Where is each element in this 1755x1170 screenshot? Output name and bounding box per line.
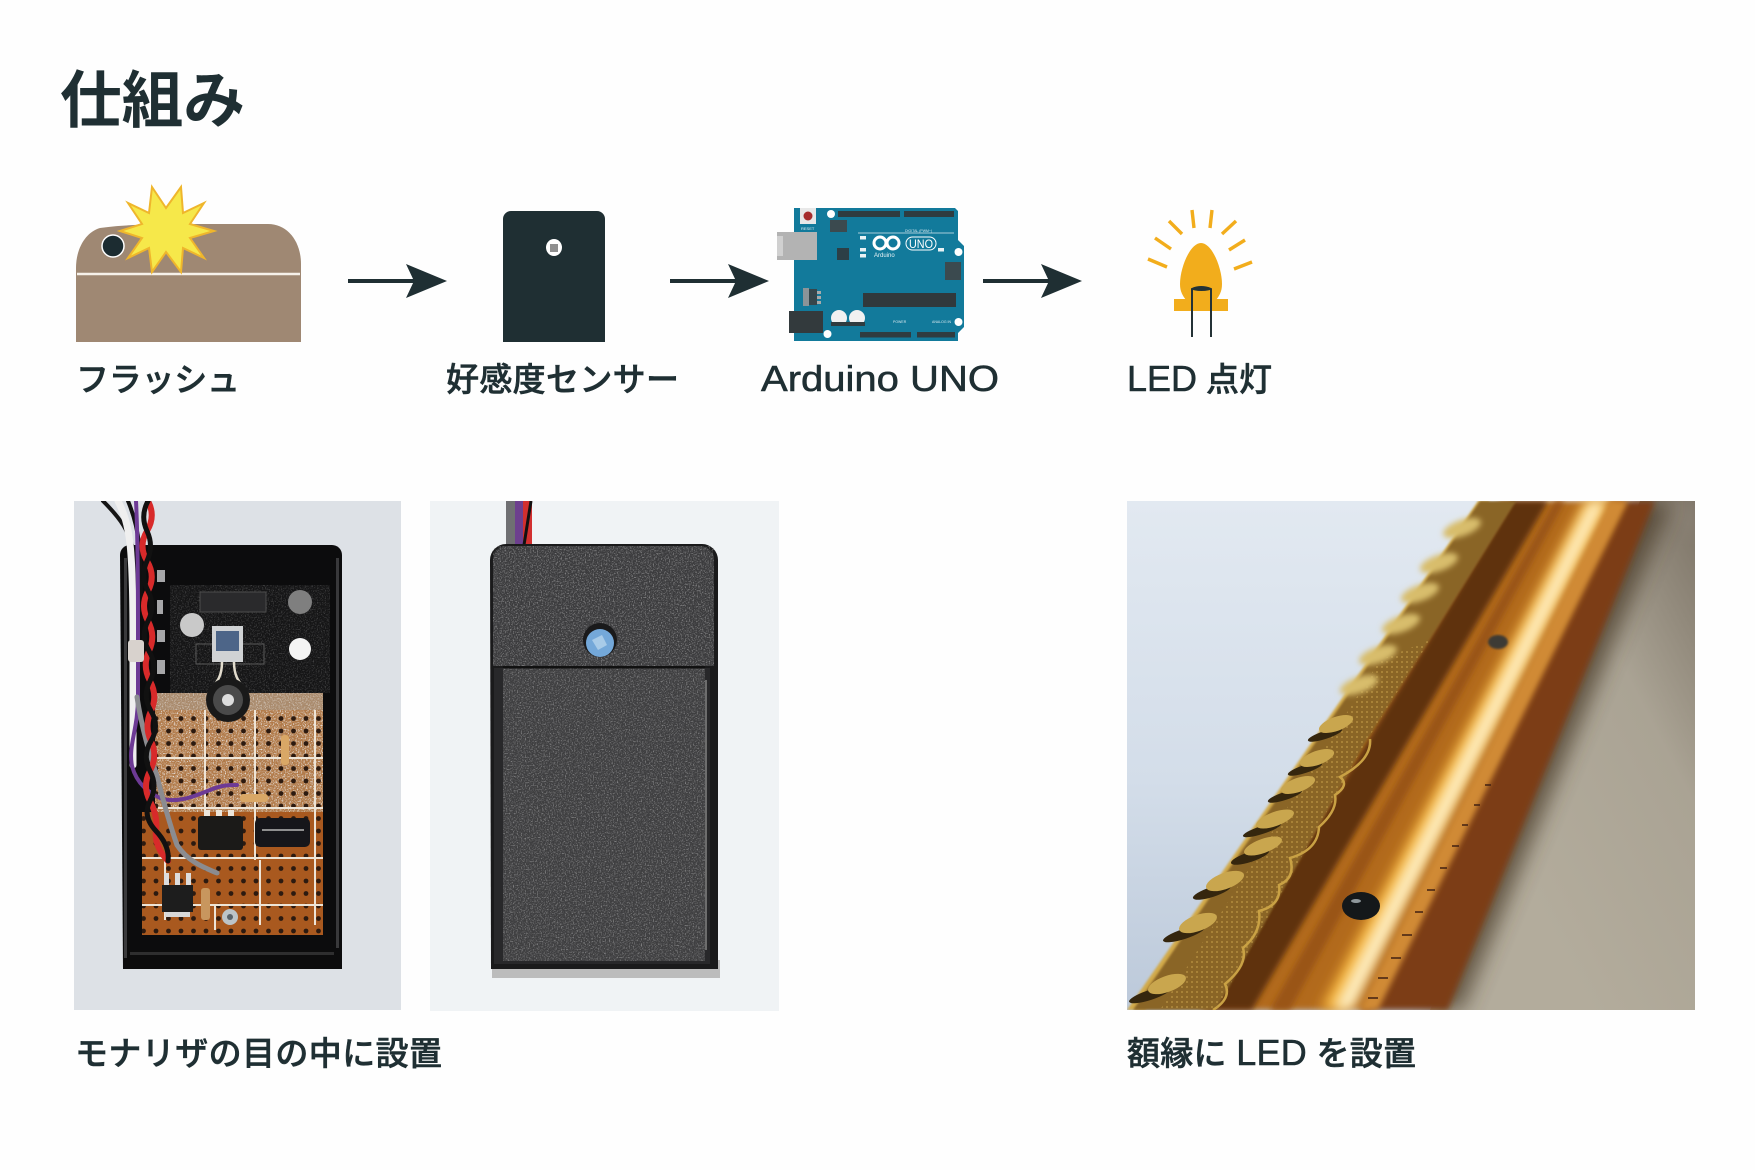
icon: Arduino UNO board: Arduino	[874, 253, 895, 259]
label: Arduino UNO: Arduino UNO	[761, 358, 999, 399]
arrow: Arduino to LED	[983, 264, 1082, 298]
icon: Arduino UNO board: ANALOG IN	[932, 320, 952, 324]
outer brown band	[1360, 501, 1655, 1010]
photo: frame with LED	[1127, 501, 1695, 1010]
channel	[1200, 501, 1625, 1010]
components	[198, 816, 243, 850]
highlight	[1320, 501, 1612, 1010]
label: sensor: 好感度センサー	[446, 361, 679, 398]
caption: LED on frame: 額縁に LED を設置	[1127, 1032, 1416, 1073]
icon: lit LED	[1148, 210, 1252, 337]
panel: process flow	[76, 187, 1272, 399]
icon: Arduino UNO board: RESET	[801, 226, 815, 231]
icon: Arduino UNO board: DIGITAL (PWM~)	[905, 229, 932, 233]
icon: Arduino UNO board: UNO	[909, 239, 933, 251]
wires	[506, 501, 532, 545]
label: LED lighting: LED 点灯	[1127, 358, 1272, 399]
scallop edge	[1213, 739, 1370, 1010]
caption: in Mona Lisa's eye: モナリザの目の中に設置	[75, 1035, 442, 1072]
circuit board	[142, 812, 323, 935]
title: 仕組み	[60, 67, 245, 136]
arrow: sensor to Arduino	[670, 264, 769, 298]
icon: sensor box	[503, 211, 605, 342]
icon: camera with flash	[76, 187, 301, 342]
battery compartment	[170, 585, 330, 693]
photo: closed sensor case	[430, 500, 779, 1011]
shadow	[492, 960, 720, 978]
beaded ridge	[1360, 501, 1628, 1010]
arrow: flash to sensor	[348, 264, 447, 298]
case	[490, 544, 718, 969]
wires	[103, 501, 237, 873]
wall surface	[1430, 501, 1695, 1010]
sensor hole	[583, 623, 617, 657]
LED: near	[1342, 892, 1380, 920]
ornate gold band	[1127, 501, 1490, 1010]
icon: Arduino UNO board: POWER	[893, 320, 907, 324]
icon: Arduino UNO board	[777, 208, 964, 341]
photo: open sensor case with circuit board	[74, 501, 401, 1010]
LED: far	[1488, 635, 1508, 649]
frame shadow	[1430, 501, 1672, 1010]
case body	[120, 545, 342, 969]
sensor	[212, 626, 243, 662]
label: flash: フラッシュ	[76, 361, 240, 398]
